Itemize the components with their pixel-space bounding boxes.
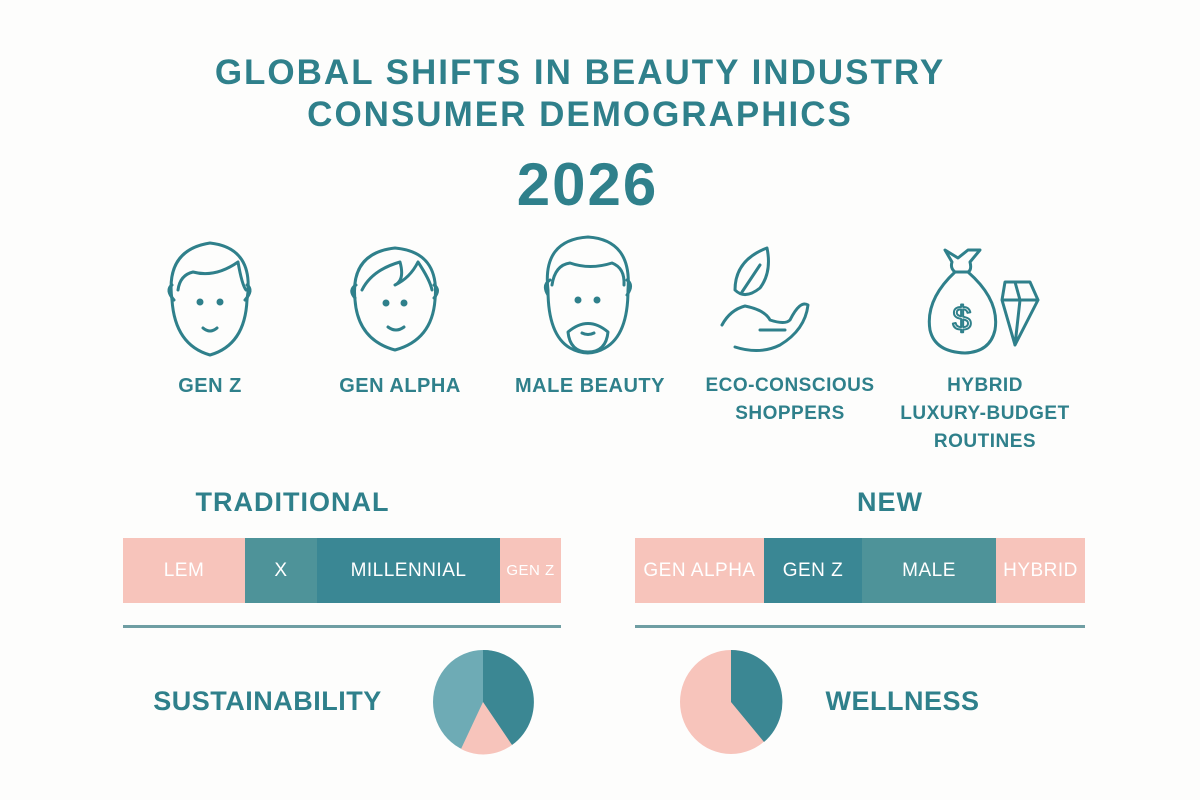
- label: male beauty: MALE BEAUTY: [515, 375, 665, 397]
- label: eco-conscious: ECO-CONSCIOUS: [705, 375, 875, 396]
- label: hybrid: ROUTINES: [934, 431, 1036, 452]
- label: hybrid: LUXURY-BUDGET: [900, 403, 1070, 424]
- label: sustainability: SUSTAINABILITY: [153, 686, 382, 716]
- heading: new: NEW: [857, 487, 923, 517]
- icons: [168, 236, 1040, 356]
- title: [215, 53, 945, 134]
- bar: traditional: LEM: [164, 560, 204, 580]
- pie: wellness: [680, 650, 782, 754]
- bar: traditional: MILLENNIAL: [351, 560, 466, 580]
- icon: male beauty: [545, 237, 630, 353]
- label: wellness: WELLNESS: [825, 686, 980, 716]
- icon: eco hand leaf: [722, 248, 808, 351]
- label: hybrid: [900, 375, 1070, 452]
- label: gen z: GEN Z: [178, 375, 242, 397]
- heading: traditional: TRADITIONAL: [196, 487, 389, 517]
- bar: new: [635, 538, 1085, 603]
- bar: traditional: X: [274, 560, 288, 580]
- title: CONSUMER DEMOGRAPHICS: [307, 95, 853, 134]
- bar: new: GEN Z: [783, 560, 843, 580]
- icon: money bag diamond: $: [953, 300, 972, 338]
- icon: money bag diamond: [929, 250, 1038, 353]
- bar: traditional: GEN Z: [506, 562, 555, 579]
- label: gen alpha: GEN ALPHA: [339, 375, 461, 397]
- icon: gen z face: [169, 243, 250, 355]
- pie: sustainability: [433, 650, 534, 754]
- label: hybrid: HYBRID: [947, 375, 1023, 396]
- year: 2026: [517, 151, 658, 218]
- icon: gen alpha face: [352, 248, 438, 350]
- label: eco-conscious: SHOPPERS: [735, 403, 845, 424]
- title: GLOBAL SHIFTS IN BEAUTY INDUSTRY: [215, 53, 945, 92]
- bar: new: HYBRID: [1003, 560, 1078, 580]
- bar: traditional: [123, 538, 561, 603]
- bar: new: MALE: [902, 560, 956, 580]
- bar: new: GEN ALPHA: [643, 560, 756, 580]
- label: eco-conscious: [705, 375, 875, 424]
